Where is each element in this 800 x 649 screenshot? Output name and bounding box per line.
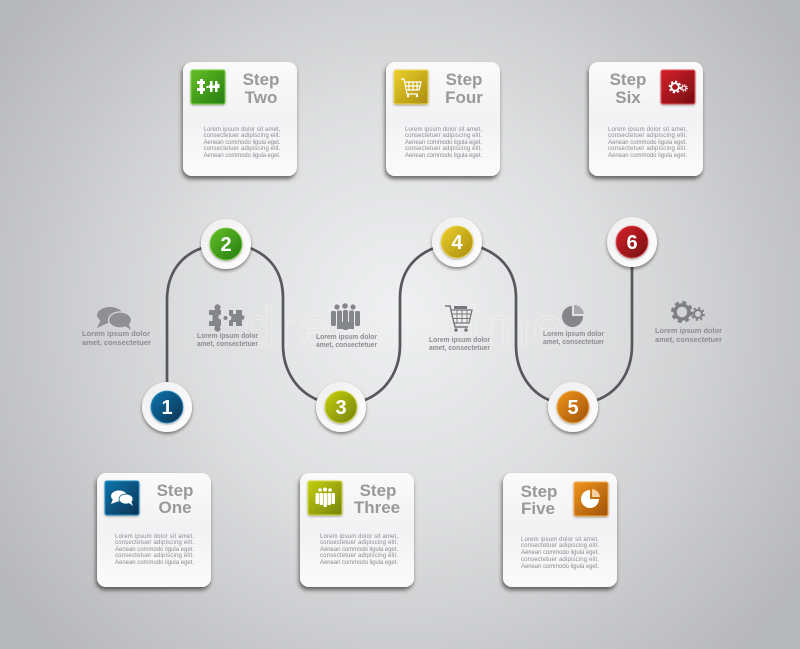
- icon: gears: [672, 302, 704, 322]
- timeline item: people: [316, 303, 377, 349]
- text block: step four: Aenean commodo ligula eget.: [405, 140, 482, 146]
- heading: step four: Four: [445, 88, 483, 107]
- timeline item: puzzle: [197, 304, 258, 348]
- node 5: 5: [567, 397, 579, 419]
- text block: step six: [608, 127, 687, 159]
- node 1: 1: [161, 397, 173, 419]
- timeline item: chat: [82, 307, 151, 347]
- text block: step five: consectetuer adipiscing elit.: [521, 557, 599, 563]
- node 2: 2: [220, 234, 232, 256]
- text block: step two: consectetuer adipiscing elit.: [204, 133, 281, 139]
- heading: step four: [445, 70, 483, 107]
- text block: step five: Aenean commodo ligula eget.: [521, 550, 599, 556]
- panel: step one: [97, 473, 211, 587]
- timeline path: [167, 248, 632, 400]
- node 4: [432, 217, 482, 267]
- node 6: 6: [626, 232, 638, 254]
- text block: step four: consectetuer adipiscing elit.: [405, 133, 482, 139]
- text block: step six: consectetuer adipiscing elit.: [608, 133, 687, 139]
- node 1: [142, 382, 192, 432]
- text block: step four: Aenean commodo ligula eget.: [405, 153, 482, 159]
- text block: step six: Aenean commodo ligula eget.: [608, 153, 687, 159]
- text block: step one: [115, 534, 194, 566]
- label: gears: amet, consectetuer: [655, 337, 722, 344]
- heading: step one: [157, 481, 193, 517]
- timeline item: gears: [655, 302, 722, 344]
- icon tile: chat blue: [105, 481, 139, 515]
- label: puzzle: amet, consectetuer: [197, 341, 258, 348]
- label: puzzle: [197, 333, 258, 348]
- label: gears: Lorem ipsum dolor: [655, 328, 722, 335]
- panel: step four: [386, 62, 500, 176]
- heading: step five: Step: [521, 482, 557, 501]
- text block: step one: consectetuer adipiscing elit.: [115, 553, 194, 559]
- icon tile: pie orange: [574, 482, 608, 516]
- text block: step one: consectetuer adipiscing elit.: [115, 540, 194, 546]
- label: chat: amet, consectetuer: [82, 340, 151, 347]
- label: pie: amet, consectetuer: [543, 339, 604, 346]
- watermark: dreamstime: [244, 295, 566, 360]
- text block: step four: [405, 127, 482, 159]
- node 3: 3: [335, 397, 347, 419]
- text block: step six: Lorem ipsum dolor sit amet,: [608, 127, 687, 133]
- text block: step five: Lorem ipsum dolor sit amet,: [521, 537, 599, 543]
- text block: step one: Lorem ipsum dolor sit amet,: [115, 534, 194, 540]
- icon tile: puzzle green: [191, 70, 225, 104]
- text block: step two: Aenean commodo ligula eget.: [204, 140, 281, 146]
- icon: people: [331, 303, 360, 330]
- heading: step two: [243, 70, 279, 107]
- text block: step one: Aenean commodo ligula eget.: [115, 560, 194, 566]
- text block: step four: Lorem ipsum dolor sit amet,: [405, 127, 482, 133]
- label: people: [316, 334, 377, 349]
- icon: puzzle: [209, 304, 244, 332]
- text block: step five: [521, 537, 599, 570]
- panel: step three: [300, 473, 414, 587]
- text block: step three: Aenean commodo ligula eget.: [320, 547, 398, 553]
- label: cart: Lorem ipsum dolor: [429, 337, 490, 344]
- icon: shopping cart: [445, 294, 475, 332]
- text block: step six: consectetuer adipiscing elit.: [608, 146, 687, 152]
- text block: step five: Aenean commodo ligula eget.: [521, 564, 599, 570]
- text block: step three: consectetuer adipiscing elit.: [320, 540, 398, 546]
- text block: step two: consectetuer adipiscing elit.: [204, 146, 281, 152]
- text block: step one: Aenean commodo ligula eget.: [115, 547, 194, 553]
- heading: step one: Step: [157, 481, 193, 500]
- label: chat: [82, 331, 151, 347]
- heading: step three: Step: [360, 481, 396, 500]
- text block: step six: Aenean commodo ligula eget.: [608, 140, 687, 146]
- icon tile: people green-yellow: [308, 481, 342, 515]
- heading: step one: One: [158, 498, 192, 517]
- timeline item: pie: [543, 305, 604, 346]
- node 5: [548, 382, 598, 432]
- label: people: amet, consectetuer: [316, 342, 377, 349]
- heading: step five: [521, 482, 557, 518]
- heading: step six: Step: [610, 70, 646, 89]
- text block: step three: Lorem ipsum dolor sit amet,: [320, 534, 398, 540]
- icon: chat bubbles: [97, 307, 132, 330]
- panel: step six: [589, 62, 703, 176]
- text block: step three: consectetuer adipiscing elit.: [320, 553, 398, 559]
- text block: step five: consectetuer adipiscing elit.: [521, 543, 599, 549]
- text block: step three: [320, 534, 398, 566]
- heading: step six: Six: [615, 88, 641, 107]
- text block: step three: Aenean commodo ligula eget.: [320, 560, 398, 566]
- heading: step two: Step: [243, 70, 279, 89]
- heading: step three: Three: [354, 498, 400, 517]
- icon: pie chart: [562, 305, 584, 327]
- text block: step two: Aenean commodo ligula eget.: [204, 153, 281, 159]
- node 3: [316, 382, 366, 432]
- node 6: [607, 217, 657, 267]
- icon tile: cart yellow: [394, 70, 428, 104]
- label: pie: [543, 331, 604, 346]
- label: people: Lorem ipsum dolor: [316, 334, 377, 341]
- text block: step two: [204, 127, 281, 159]
- heading: step five: Five: [521, 499, 555, 518]
- text block: step two: Lorem ipsum dolor sit amet,: [204, 127, 281, 133]
- label: cart: [429, 337, 490, 352]
- icon tile: gears red: [661, 70, 695, 104]
- node 2: [201, 219, 251, 269]
- text block: step four: consectetuer adipiscing elit.: [405, 146, 482, 152]
- heading: step four: Step: [446, 70, 482, 89]
- panel: step five: [503, 473, 617, 587]
- panel: step two: [183, 62, 297, 176]
- heading: step two: Two: [245, 88, 277, 107]
- node 4: 4: [451, 232, 463, 254]
- timeline item: cart: [429, 294, 490, 352]
- label: gears: [655, 328, 722, 344]
- label: cart: amet, consectetuer: [429, 345, 490, 352]
- heading: step six: [610, 70, 646, 107]
- label: puzzle: Lorem ipsum dolor: [197, 333, 258, 340]
- heading: step three: [354, 481, 400, 517]
- label: pie: Lorem ipsum dolor: [543, 331, 604, 338]
- label: chat: Lorem ipsum dolor: [82, 331, 150, 338]
